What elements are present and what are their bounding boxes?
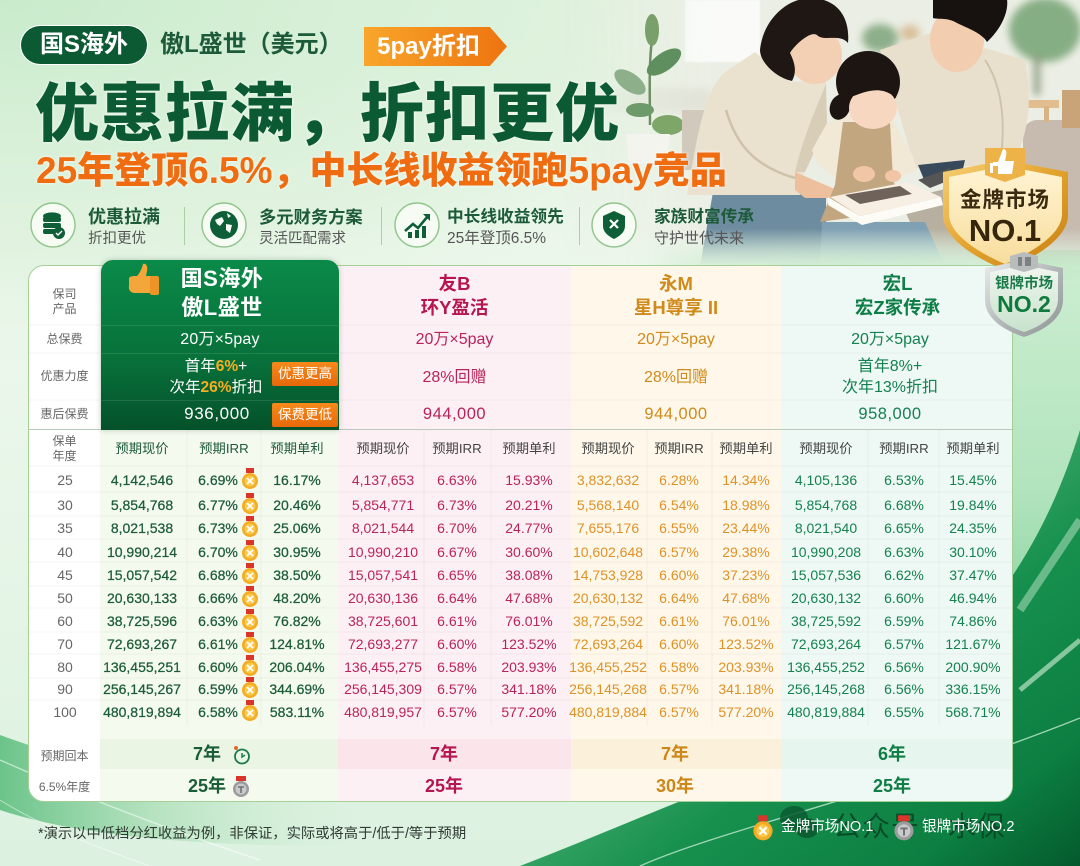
row: year 90: 6.57% bbox=[437, 681, 477, 697]
row: year 45: 37.47% bbox=[949, 567, 997, 583]
row: year 80 bbox=[57, 655, 1001, 676]
row: year 90: 6.57% bbox=[659, 681, 699, 697]
row: year 25 bbox=[57, 468, 997, 489]
summary: 6.5% 国S: 25年 bbox=[188, 776, 226, 796]
row: year 100: 480,819,884 bbox=[569, 704, 647, 720]
row: year 35: 8,021,538 bbox=[111, 520, 173, 536]
row: year 35: 23.44% bbox=[722, 520, 770, 536]
row: year 30: 6.73% bbox=[437, 497, 477, 513]
icon: silver medal bbox=[233, 776, 249, 797]
column head: IRR: 预期IRR bbox=[432, 441, 482, 456]
row: year 25: 6.63% bbox=[437, 472, 477, 488]
summary: payback 宏L: 6年 bbox=[878, 744, 906, 764]
row: year 50: 6.64% bbox=[437, 590, 477, 606]
discount: 宏L: 次年13%折扣 bbox=[842, 379, 938, 396]
column head: IRR: 预期IRR bbox=[199, 441, 249, 456]
header tags bbox=[20, 25, 507, 66]
row: year 40: 40 bbox=[57, 544, 73, 560]
label: product bbox=[52, 287, 76, 316]
row: year 60: 76.01% bbox=[505, 613, 553, 629]
row: year 80: 136,455,275 bbox=[344, 659, 422, 675]
text: offer: 优惠拉满 bbox=[88, 207, 160, 227]
summary: 6.5% 宏L: 25年 bbox=[873, 776, 911, 796]
summary: 6.5% 永M: 30年 bbox=[656, 776, 694, 796]
badge: silver market no.2: NO.2 bbox=[997, 291, 1051, 317]
discount: 次年26%折扣 bbox=[169, 379, 263, 396]
row: year 60: 76.01% bbox=[722, 613, 770, 629]
row: year 25: 4,105,136 bbox=[795, 472, 857, 488]
column head: value: 预期现价 bbox=[115, 441, 169, 456]
row: year 70: 6.61% bbox=[198, 636, 238, 652]
row: year 70: 6.57% bbox=[884, 636, 924, 652]
icon: white thumb bbox=[990, 149, 1014, 174]
discount: 宏L: 首年8%+ bbox=[858, 358, 922, 375]
row: year 35: 24.35% bbox=[949, 520, 997, 536]
row: year 50: 47.68% bbox=[722, 590, 770, 606]
pill: insurer: 国S海外 bbox=[40, 31, 128, 58]
row: year 70: 70 bbox=[57, 636, 73, 652]
row: year 70: 121.67% bbox=[945, 636, 1001, 652]
row: year 25: 4,142,546 bbox=[111, 472, 173, 488]
row: year 25: 6.69% bbox=[198, 472, 238, 488]
row: year 40: 10,602,648 bbox=[573, 544, 643, 560]
row: year 35: 6.73% bbox=[198, 520, 238, 536]
row: year 40: 29.38% bbox=[722, 544, 770, 560]
label: product: 保司 bbox=[52, 287, 76, 301]
row: year 70: 6.60% bbox=[659, 636, 699, 652]
row: year 35: 35 bbox=[57, 520, 73, 536]
row: year 45: 6.62% bbox=[884, 567, 924, 583]
legend and watermark bbox=[753, 806, 1014, 842]
row: year 50: 20,630,132 bbox=[573, 590, 643, 606]
column head: simple: 预期单利 bbox=[946, 441, 1000, 456]
row: year 60: 6.59% bbox=[884, 613, 924, 629]
row: year 70: 6.60% bbox=[437, 636, 477, 652]
label: policy year bbox=[52, 434, 76, 463]
row: year 50: 6.66% bbox=[198, 590, 238, 606]
row: year 30: 30 bbox=[57, 497, 73, 513]
row: year 45: 14,753,928 bbox=[573, 567, 643, 583]
row: year 80: 136,455,252 bbox=[787, 659, 865, 675]
row: year 100: 100 bbox=[53, 704, 77, 720]
row: year 40: 30.60% bbox=[505, 544, 553, 560]
row: year 60: 74.86% bbox=[949, 613, 997, 629]
row: year 25: 3,832,632 bbox=[577, 472, 639, 488]
row: year 25: 16.17% bbox=[273, 472, 321, 488]
product head: 宏L bbox=[855, 273, 940, 318]
product head: 永M: 星H尊享 II bbox=[634, 297, 718, 318]
column head: value: 预期现价 bbox=[581, 441, 635, 456]
badge: silver market no.2 bbox=[985, 252, 1063, 337]
text: legacy: 家族财富传承 bbox=[654, 207, 754, 226]
row: year 100: 6.55% bbox=[884, 704, 924, 720]
row: year 100: 6.57% bbox=[437, 704, 477, 720]
row: year 40: 6.70% bbox=[198, 544, 238, 560]
row: year 60: 6.61% bbox=[659, 613, 699, 629]
row: year 70: 72,693,264 bbox=[791, 636, 861, 652]
row: year 25: 14.34% bbox=[722, 472, 770, 488]
product name: 傲L盛世 bbox=[181, 295, 263, 320]
row: year 50: 47.68% bbox=[505, 590, 553, 606]
row: year 80: 80 bbox=[57, 659, 73, 675]
benefit strip bbox=[30, 202, 754, 248]
column head: simple: 预期单利 bbox=[719, 441, 773, 456]
sub text: offer: 折扣更优 bbox=[88, 231, 146, 247]
row: year 60: 38,725,596 bbox=[107, 613, 177, 629]
row: year 45: 15,057,541 bbox=[348, 567, 418, 583]
tag: 5pay discount: 5pay折扣 bbox=[377, 33, 480, 60]
product name: 傲L盛世（美元） bbox=[160, 31, 343, 58]
subtitle: 25年登顶6.5%，中长线收益领跑5pay竞品 bbox=[36, 150, 727, 191]
row: year 70: 123.52% bbox=[718, 636, 774, 652]
pill: insurer bbox=[21, 26, 147, 64]
row: year 25: 4,137,653 bbox=[352, 472, 414, 488]
premium: 友B: 20万×5pay bbox=[416, 331, 493, 348]
row: year 90: 256,145,267 bbox=[103, 681, 181, 697]
row: year 40: 10,990,208 bbox=[791, 544, 861, 560]
row: year 45: 15,057,542 bbox=[107, 567, 177, 583]
tag: higher offer bbox=[272, 362, 338, 386]
row: year 100: 568.71% bbox=[945, 704, 1001, 720]
row: year 30: 20.21% bbox=[505, 497, 553, 513]
column head: value: 预期现价 bbox=[799, 441, 853, 456]
row: year 30: 5,854,768 bbox=[111, 497, 173, 513]
row: year 35 bbox=[57, 516, 997, 537]
row labels bbox=[39, 287, 90, 794]
product head: 永M: 永M bbox=[659, 273, 693, 294]
row: year 50: 20,630,132 bbox=[791, 590, 861, 606]
discount: 宏L bbox=[842, 357, 938, 396]
row: year 35: 7,655,176 bbox=[577, 520, 639, 536]
icon: coins bbox=[30, 202, 76, 248]
sub text: legacy: 守护世代未来 bbox=[654, 230, 744, 247]
row: year 30: 20.46% bbox=[273, 497, 321, 513]
row: year 25: 15.93% bbox=[505, 472, 553, 488]
row: year 60: 76.82% bbox=[273, 613, 321, 629]
discount: 永M: 28%回赠 bbox=[644, 369, 708, 386]
tag: higher offer: 优惠更高 bbox=[278, 366, 332, 381]
row: year 25: 6.53% bbox=[884, 472, 924, 488]
column head: value: 预期现价 bbox=[356, 441, 410, 456]
row: year 25: 6.28% bbox=[659, 472, 699, 488]
row: year 60: 38,725,592 bbox=[573, 613, 643, 629]
legend: gold: 金牌市场NO.1 bbox=[781, 819, 873, 835]
row: year 50: 46.94% bbox=[949, 590, 997, 606]
watermark text: 公众号 · 水保 bbox=[833, 811, 1006, 842]
row: year 30: 6.68% bbox=[884, 497, 924, 513]
row: year 45: 45 bbox=[57, 567, 73, 583]
row: year 40 bbox=[57, 540, 997, 561]
row: year 100: 480,819,884 bbox=[787, 704, 865, 720]
net premium: 友B: 944,000 bbox=[423, 405, 486, 423]
row: year 90: 90 bbox=[57, 681, 73, 697]
text: plans: 多元财务方案 bbox=[259, 207, 363, 227]
row: year 45: 38.50% bbox=[273, 567, 321, 583]
product head: 永M bbox=[634, 273, 718, 318]
row: year 80: 200.90% bbox=[945, 659, 1001, 675]
row: year 35: 8,021,540 bbox=[795, 520, 857, 536]
row: year 100 bbox=[53, 700, 1001, 721]
row: year 50: 50 bbox=[57, 590, 73, 606]
row: year 40: 10,990,214 bbox=[107, 544, 177, 560]
product head: 友B: 环Y盈活 bbox=[421, 297, 488, 318]
row: year 80: 6.58% bbox=[659, 659, 699, 675]
summary: 6.5% 友B: 25年 bbox=[425, 776, 463, 796]
premium: 永M: 20万×5pay bbox=[637, 331, 715, 348]
label: payback: 预期回本 bbox=[40, 749, 88, 763]
badge: silver market no.2: 银牌市场 bbox=[995, 274, 1053, 292]
icon: globe bbox=[201, 202, 247, 248]
summary: payback 友B: 7年 bbox=[430, 744, 458, 764]
discount: 首年6%+ bbox=[185, 358, 247, 375]
icon: thumbs up bbox=[128, 264, 159, 295]
label: net premium: 惠后保费 bbox=[40, 407, 88, 421]
row: year 50: 6.64% bbox=[659, 590, 699, 606]
row: year 35: 24.77% bbox=[505, 520, 553, 536]
product name bbox=[181, 266, 263, 320]
row: year 45: 15,057,536 bbox=[791, 567, 861, 583]
row: year 30: 19.84% bbox=[949, 497, 997, 513]
title: 优惠拉满，折扣更优 bbox=[35, 78, 620, 150]
row: year 25: 25 bbox=[57, 472, 73, 488]
row: year 60: 60 bbox=[57, 613, 73, 629]
row: year 90: 336.15% bbox=[945, 681, 1001, 697]
row: year 70: 124.81% bbox=[269, 636, 325, 652]
badge: gold market no.1 bbox=[943, 148, 1068, 266]
row: year 80: 6.60% bbox=[198, 659, 238, 675]
photo: family reading an album on a sofa bbox=[614, 0, 1080, 265]
row: year 40: 30.95% bbox=[273, 544, 321, 560]
row: year 80: 6.56% bbox=[884, 659, 924, 675]
row: year 80: 203.93% bbox=[501, 659, 557, 675]
icon: gold medal bbox=[753, 815, 773, 840]
row: year 100: 577.20% bbox=[718, 704, 774, 720]
row: year 60: 6.63% bbox=[198, 613, 238, 629]
row: year 90 bbox=[57, 677, 1001, 698]
row: year 70 bbox=[57, 632, 1001, 653]
row: year 100: 6.57% bbox=[659, 704, 699, 720]
row: year 40: 6.67% bbox=[437, 544, 477, 560]
label: discount: 优惠力度 bbox=[40, 369, 88, 383]
product head: 宏L: 宏Z家传承 bbox=[855, 297, 940, 318]
net premium: 宏L: 958,000 bbox=[858, 405, 922, 423]
row: year 25: 15.45% bbox=[949, 472, 997, 488]
row: year 45: 6.65% bbox=[437, 567, 477, 583]
row: year 70: 123.52% bbox=[501, 636, 557, 652]
row: year 70: 72,693,277 bbox=[348, 636, 418, 652]
summary: payback 永M: 7年 bbox=[661, 744, 689, 764]
discount bbox=[169, 358, 263, 396]
sub text: returns: 25年登顶6.5% bbox=[447, 230, 546, 247]
row: year 100: 577.20% bbox=[501, 704, 557, 720]
footnote: *演示以中低档分红收益为例，非保证，实际或将高于/低于/等于预期 bbox=[38, 826, 466, 842]
price: 936,000 bbox=[184, 404, 250, 423]
row: year 30: 18.98% bbox=[722, 497, 770, 513]
legend: silver: 银牌市场NO.2 bbox=[922, 819, 1014, 835]
watermark: wechat icon bbox=[780, 806, 819, 838]
row: year 30: 6.54% bbox=[659, 497, 699, 513]
row: year 60: 38,725,592 bbox=[791, 613, 861, 629]
row: year 90: 256,145,309 bbox=[344, 681, 422, 697]
product head: 友B: 友B bbox=[439, 273, 470, 294]
row: year 90: 6.59% bbox=[198, 681, 238, 697]
row: year 90: 344.69% bbox=[269, 681, 325, 697]
row: year 90: 341.18% bbox=[501, 681, 557, 697]
row: year 90: 256,145,268 bbox=[569, 681, 647, 697]
text: returns: 中长线收益领先 bbox=[447, 207, 564, 226]
column head: IRR: 预期IRR bbox=[879, 441, 929, 456]
row: year 30: 5,854,768 bbox=[795, 497, 857, 513]
row: year 40: 10,990,210 bbox=[348, 544, 418, 560]
icon: shield bbox=[591, 202, 637, 248]
row: year 60: 38,725,601 bbox=[348, 613, 418, 629]
label: policy year: 年度 bbox=[52, 449, 76, 463]
row: year 30: 5,568,140 bbox=[577, 497, 639, 513]
panel: highlighted product header bbox=[101, 260, 339, 430]
label: 6.5% year: 6.5%年度 bbox=[39, 780, 90, 794]
product name: 国S海外 bbox=[181, 266, 263, 291]
icon: stopwatch bbox=[234, 746, 250, 764]
row: year 80: 136,455,251 bbox=[103, 659, 181, 675]
row: year 50: 48.20% bbox=[273, 590, 321, 606]
tag: lower premium bbox=[272, 403, 338, 427]
icon: growth chart bbox=[394, 202, 440, 248]
row: year 45: 37.23% bbox=[722, 567, 770, 583]
row: year 30: 6.77% bbox=[198, 497, 238, 513]
row: year 45 bbox=[57, 563, 997, 584]
row: year 40: 6.57% bbox=[659, 544, 699, 560]
row: year 35: 6.65% bbox=[884, 520, 924, 536]
row: year 90: 256,145,268 bbox=[787, 681, 865, 697]
row: year 70: 72,693,267 bbox=[107, 636, 177, 652]
row: year 70: 72,693,264 bbox=[573, 636, 643, 652]
row: year 35: 6.70% bbox=[437, 520, 477, 536]
row: year 50 bbox=[57, 586, 997, 607]
row: year 35: 8,021,544 bbox=[352, 520, 414, 536]
row: year 100: 6.58% bbox=[198, 704, 238, 720]
discount: 友B: 28%回赠 bbox=[422, 369, 487, 386]
row: year 35: 25.06% bbox=[273, 520, 321, 536]
summary: payback 国S: 7年 bbox=[193, 744, 221, 764]
row: year 90: 341.18% bbox=[718, 681, 774, 697]
product head: 宏L: 宏L bbox=[883, 273, 912, 294]
column head: IRR: 预期IRR bbox=[654, 441, 704, 456]
label: product: 产品 bbox=[52, 302, 76, 316]
row: year 80: 206.04% bbox=[269, 659, 325, 675]
icon: silver medal bbox=[894, 815, 914, 840]
row: year 80: 136,455,252 bbox=[569, 659, 647, 675]
row: year 100: 480,819,957 bbox=[344, 704, 422, 720]
row: year 35: 6.55% bbox=[659, 520, 699, 536]
row: year 50: 20,630,136 bbox=[348, 590, 418, 606]
column head: simple: 预期单利 bbox=[502, 441, 556, 456]
row: year 30: 5,854,771 bbox=[352, 497, 414, 513]
premium: 宏L: 20万×5pay bbox=[851, 331, 929, 348]
row: year 60 bbox=[57, 609, 997, 630]
premium: 20万×5pay bbox=[180, 331, 260, 348]
row: year 45: 6.60% bbox=[659, 567, 699, 583]
row: year 30 bbox=[57, 493, 997, 514]
sub header row bbox=[115, 441, 1000, 456]
panel: comparison table backdrop bbox=[28, 265, 1013, 802]
row: year 100: 480,819,894 bbox=[103, 704, 181, 720]
net premium: 永M: 944,000 bbox=[644, 405, 708, 423]
tag: 5pay discount bbox=[364, 27, 507, 66]
row: year 40: 30.10% bbox=[949, 544, 997, 560]
tag: lower premium: 保费更低 bbox=[278, 407, 332, 422]
badge: gold market no.1: NO.1 bbox=[969, 213, 1041, 248]
row: year 45: 6.68% bbox=[198, 567, 238, 583]
row: year 80: 203.93% bbox=[718, 659, 774, 675]
label: policy year: 保单 bbox=[52, 434, 76, 448]
row: year 100: 583.11% bbox=[270, 704, 324, 720]
plant on the left bbox=[610, 14, 686, 164]
sub text: plans: 灵活匹配需求 bbox=[259, 231, 346, 247]
row: year 45: 38.08% bbox=[505, 567, 553, 583]
product head: 友B bbox=[421, 273, 488, 318]
row: year 60: 6.61% bbox=[437, 613, 477, 629]
column head: simple: 预期单利 bbox=[270, 441, 324, 456]
badge: gold market no.1: 金牌市场 bbox=[960, 187, 1050, 212]
row: year 40: 6.63% bbox=[884, 544, 924, 560]
row: year 50: 6.60% bbox=[884, 590, 924, 606]
label: total premium: 总保费 bbox=[46, 332, 82, 346]
row: year 50: 20,630,133 bbox=[107, 590, 177, 606]
row: year 80: 6.58% bbox=[437, 659, 477, 675]
row: year 90: 6.56% bbox=[884, 681, 924, 697]
